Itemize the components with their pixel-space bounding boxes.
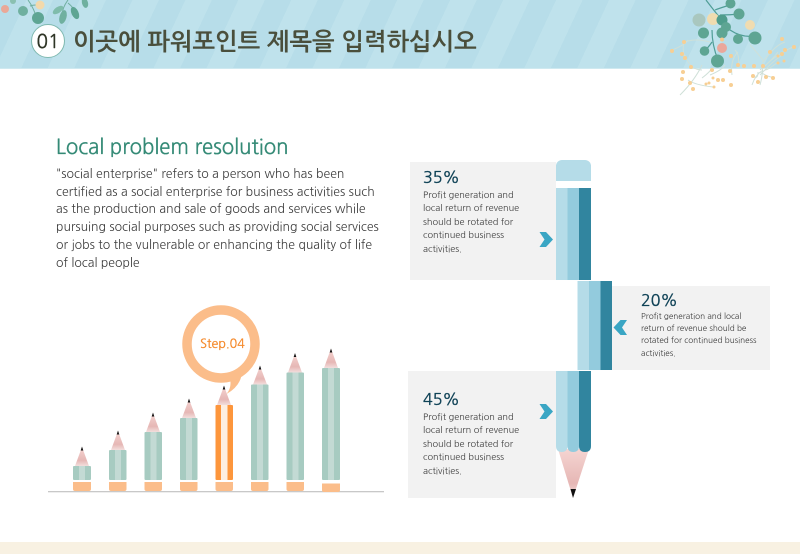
baseline <box>48 491 384 492</box>
section number badge: 01 <box>36 32 60 51</box>
description: 35%: Profit generation and <box>423 191 514 200</box>
panel: 45% <box>408 371 556 498</box>
title: 이곳에 파워포인트 제목을 입력하십시오 <box>73 30 477 54</box>
body text: of local people <box>56 256 140 269</box>
value: 45%: 45% <box>423 392 460 408</box>
section number badge <box>31 24 65 58</box>
footer band <box>0 542 800 554</box>
description: 45%: activities. <box>423 467 462 476</box>
description: 20% <box>641 312 756 358</box>
pencil 8 <box>322 348 340 492</box>
pencil tip <box>558 449 589 498</box>
body text: or jobs to the vulnerable or enhancing the quality of life <box>56 238 372 251</box>
pencil 7 <box>286 353 304 491</box>
arrow: middle <box>614 320 627 335</box>
description: 45% <box>423 413 519 476</box>
header band <box>0 0 800 69</box>
description: 20%: rotated for continued business <box>641 337 756 345</box>
description: 45%: continued business <box>423 453 504 462</box>
pencil 4 <box>180 398 198 491</box>
arrow: bottom <box>540 404 553 419</box>
value: 20%: 20% <box>641 293 678 309</box>
pencil segment top <box>556 188 591 280</box>
description: 45%: local return of revenue <box>423 426 519 435</box>
pencil 2 <box>109 430 126 491</box>
callout: step.04 <box>187 310 255 394</box>
description: 20%: return of revenue should be <box>641 325 746 333</box>
description: 35%: local return of revenue <box>423 204 519 213</box>
pencil bar chart <box>48 305 384 492</box>
body text <box>56 167 379 269</box>
description: 45%: should be rotated for <box>423 440 513 449</box>
decoration: top-left leaves <box>1 0 88 24</box>
body text: as the production and sale of goods and services while <box>56 202 366 215</box>
panel: 20% <box>612 286 770 370</box>
pencil cap <box>556 160 591 181</box>
pencil 5: highlighted <box>216 386 233 491</box>
body text: pursuing social purposes such as providing social services <box>56 220 379 233</box>
pencil segment bottom <box>556 371 591 452</box>
description: 20%: activities. <box>641 350 676 358</box>
decoration: top-right leaves and berries <box>670 0 796 96</box>
arrow: top <box>540 232 553 247</box>
panel: 35% <box>410 162 556 280</box>
body text: certified as a social enterprise for business activities such <box>56 185 375 198</box>
body text: "social enterprise" refers to a person who has been <box>56 167 344 180</box>
segmented pencil <box>540 160 627 498</box>
description: 35%: activities. <box>423 245 462 254</box>
pencil 6 <box>251 366 268 491</box>
pencil segment middle <box>578 281 612 370</box>
pencil 1 <box>73 446 91 491</box>
description: 45%: Profit generation and <box>423 413 514 422</box>
description: 35%: should be rotated for <box>423 218 513 227</box>
description: 20%: Profit generation and local <box>641 313 741 321</box>
description: 35% <box>423 191 519 254</box>
description: 35%: continued business <box>423 231 504 240</box>
pencil 3 <box>144 412 162 491</box>
callout: step.04: Step.04 <box>200 337 245 350</box>
heading: local problem resolution: Local problem resolution <box>56 137 288 157</box>
value: 35%: 35% <box>423 170 460 186</box>
